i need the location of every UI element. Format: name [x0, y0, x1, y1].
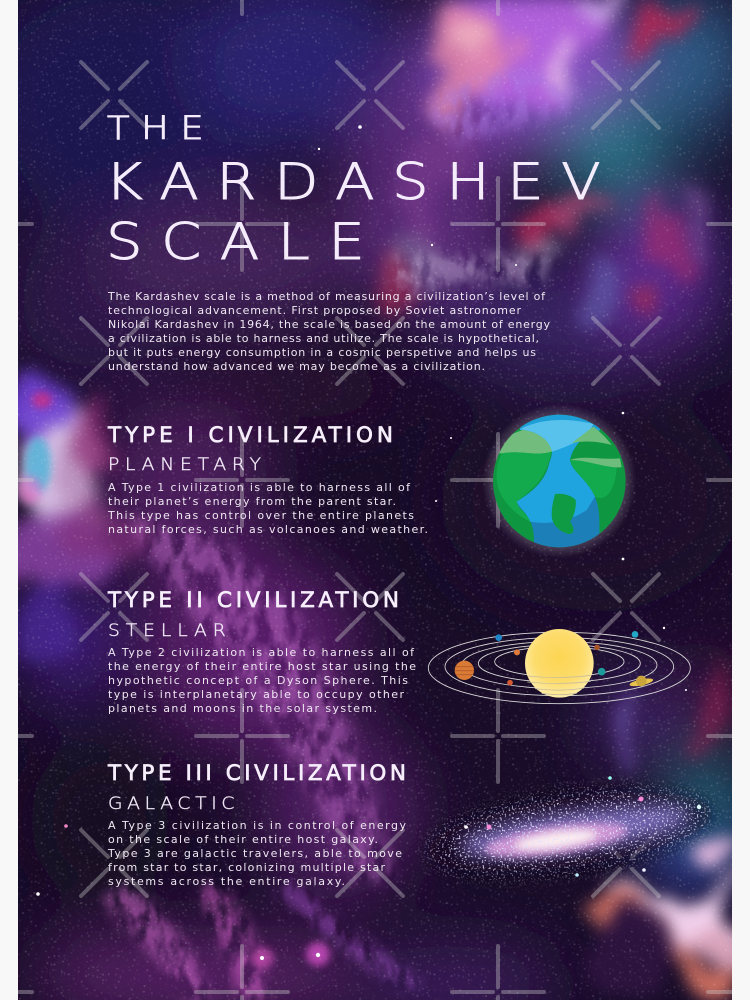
body: type 2: A Type 2 civilization is able to harness all of	[108, 646, 415, 659]
sun	[525, 629, 594, 698]
icon: spiral galaxy	[421, 772, 719, 892]
body: type 3: A Type 3 civilization is in control of energy	[108, 819, 406, 832]
body: type 2: hypothetic concept of a Dyson Sphere. This	[108, 674, 408, 687]
body: type 1: This type has control over the entire planets	[107, 509, 414, 522]
title: SCALE	[106, 213, 365, 271]
icon: earth	[482, 404, 637, 558]
planets	[455, 631, 654, 688]
heading: type 2: TYPE II CIVILIZATION	[107, 588, 399, 613]
body: type 3: systems across the entire galaxy.	[108, 875, 345, 888]
title	[105, 110, 601, 271]
intro paragraph: understand how advanced we may become as a civilization.	[108, 360, 485, 373]
body: type 3: from star to star, colonizing multiple star	[108, 861, 385, 874]
galaxy bright stars	[464, 776, 701, 877]
section: type 3 civilization	[107, 761, 406, 888]
body: type 2: the energy of their entire host star using the	[108, 660, 416, 673]
body: type 1: their planet’s energy from the parent star.	[108, 495, 396, 508]
body: type 1: A Type 1 civilization is able to harness all of	[108, 481, 411, 494]
subheading: galactic: GALACTIC	[108, 794, 235, 814]
body: type 3: on the scale of their entire host galaxy.	[108, 833, 378, 846]
title: KARDASHEV	[105, 153, 601, 211]
bright stars	[36, 125, 687, 960]
body: type 2: planets and moons in the solar system.	[108, 702, 377, 715]
body: type 2	[108, 646, 416, 715]
section: type 2 civilization	[107, 588, 416, 715]
intro paragraph: but it puts energy consumption in a cosmic perspetive and helps us	[108, 346, 536, 359]
title: THE	[107, 110, 204, 147]
heading: type 1: TYPE I CIVILIZATION	[107, 423, 393, 448]
orbits	[428, 632, 690, 704]
heading: type 3: TYPE III CIVILIZATION	[107, 761, 406, 786]
body: type 3	[107, 819, 406, 888]
intro paragraph	[107, 290, 550, 373]
icon: solar system	[428, 629, 690, 704]
intro paragraph: Nikolai Kardashev in 1964, the scale is based on the amount of energy	[108, 318, 550, 331]
intro paragraph: The Kardashev scale is a method of measuring a civilization’s level of	[107, 290, 546, 303]
body: type 1: natural forces, such as volcanoes and weather.	[108, 523, 428, 536]
body: type 3: Type 3 are galactic travelers, able to move	[107, 847, 402, 860]
body: type 1	[107, 481, 428, 536]
intro paragraph: a civilization is able to harness and utilize. The scale is hypothetical,	[108, 332, 539, 345]
subheading: planetary: PLANETARY	[108, 455, 261, 475]
subheading: stellar: STELLAR	[108, 621, 226, 641]
orbit fronts	[527, 675, 591, 695]
intro paragraph: technological advancement. First proposed by Soviet astronomer	[108, 304, 521, 317]
body: type 2: type is interplanetary able to occupy other	[108, 688, 404, 701]
section: type 1 civilization	[107, 423, 428, 536]
